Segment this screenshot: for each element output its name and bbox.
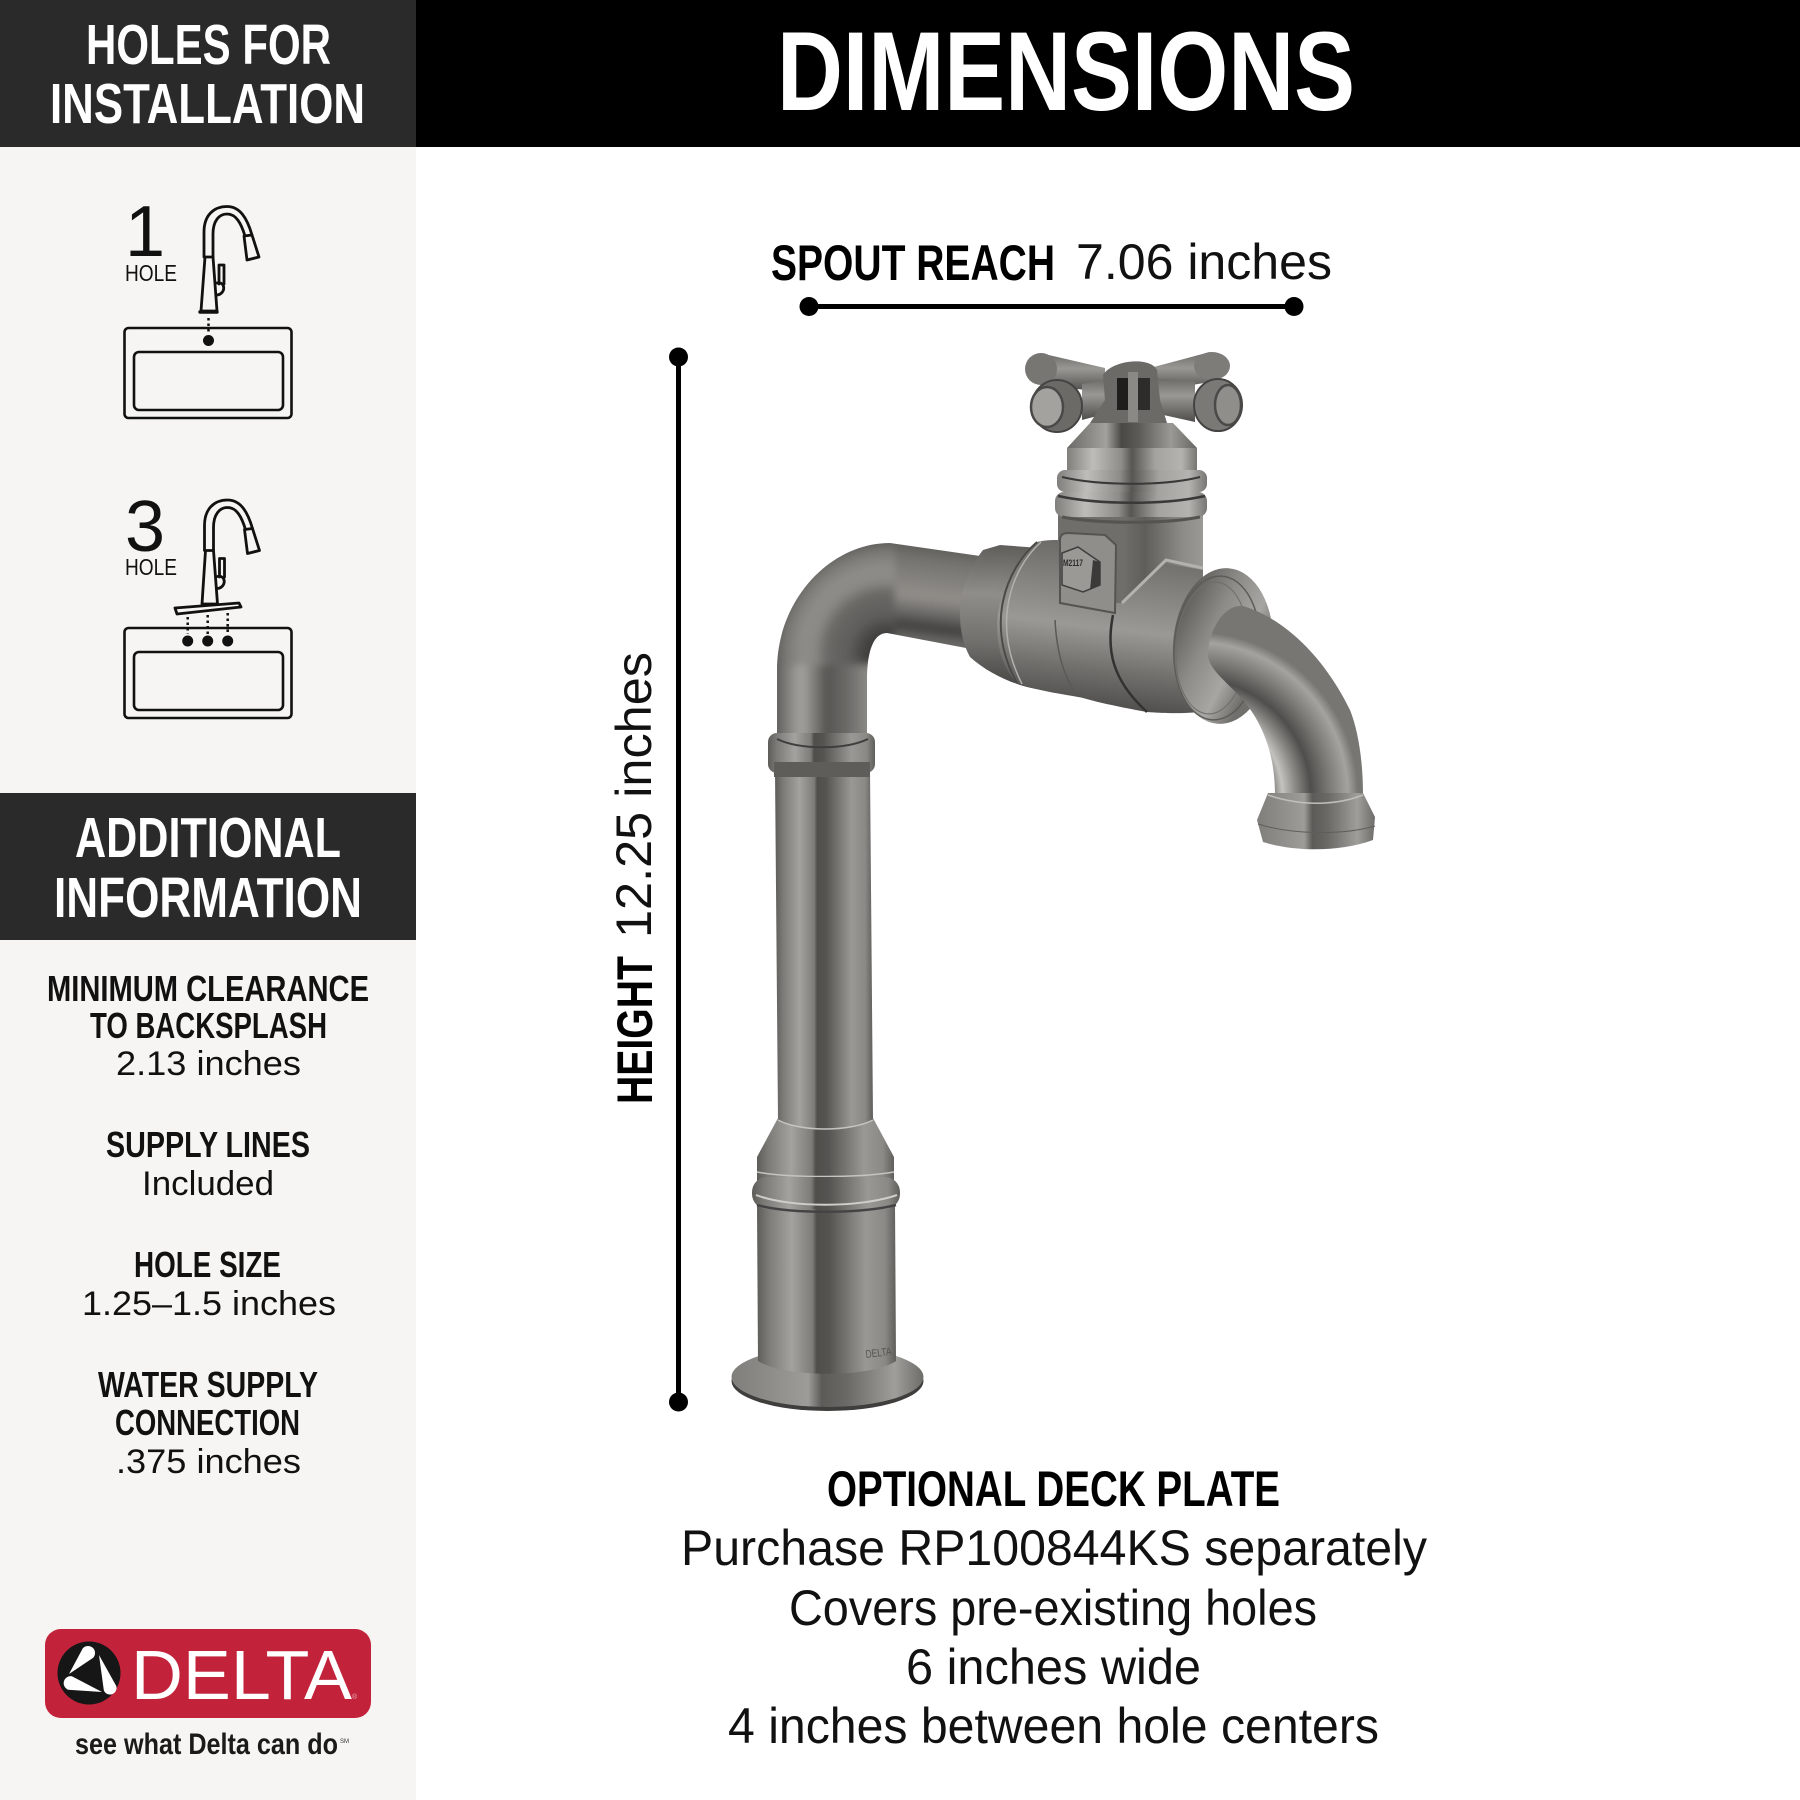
faucet: lower base bbox=[757, 1205, 896, 1374]
header: holes for installation bbox=[0, 0, 416, 147]
faucet: right flange bbox=[1168, 565, 1278, 727]
faucet: valve rings bbox=[1055, 470, 1207, 522]
faucet: spout bbox=[1208, 606, 1363, 795]
faucet: handle back arms bbox=[1025, 352, 1230, 392]
logo: delta: see what Delta can do bbox=[75, 1728, 338, 1761]
icon: sink with three holes bbox=[124, 613, 292, 718]
text block: hole size: HOLE SIZE bbox=[134, 1244, 281, 1285]
title bar: dimensions: DIMENSIONS bbox=[777, 9, 1355, 134]
faucet: elbow pipe bbox=[777, 543, 979, 734]
text block: minimum clearance: TO BACKSPLASH bbox=[90, 1005, 327, 1046]
faucet: handle front arms and hub bbox=[1031, 361, 1242, 432]
faucet: bolt plate bbox=[1060, 533, 1116, 613]
header: additional information: ADDITIONAL bbox=[75, 806, 341, 870]
numeral and label: 3 hole bbox=[125, 487, 177, 580]
dimension: spout reach: 7.06 inches bbox=[1076, 234, 1332, 290]
dimension: spout reach: SPOUT REACH bbox=[771, 235, 1055, 291]
icon: sink with one hole bbox=[124, 318, 292, 418]
text block: minimum clearance: 2.13 inches bbox=[116, 1045, 301, 1083]
text block: optional deck plate: 4 inches between hole centers bbox=[728, 1698, 1379, 1754]
faucet: column ring bbox=[768, 733, 875, 777]
logo: delta bbox=[45, 1629, 371, 1761]
panel: three hole option bbox=[124, 487, 292, 718]
dimension: height: 12.25 inches bbox=[606, 652, 662, 938]
text block: supply lines: SUPPLY LINES bbox=[106, 1124, 310, 1165]
header: additional information: INFORMATION bbox=[54, 866, 362, 930]
text block: optional deck plate bbox=[681, 1461, 1427, 1754]
faucet: spout nozzle bbox=[1257, 793, 1375, 849]
title bar: dimensions bbox=[416, 0, 1800, 147]
faucet: valve dome bbox=[1067, 423, 1197, 480]
text block: minimum clearance bbox=[47, 968, 369, 1083]
faucet: base cone and collar bbox=[752, 1118, 900, 1212]
header: holes for installation: HOLES FOR bbox=[86, 13, 331, 77]
logo: delta: DELTA bbox=[131, 1636, 352, 1714]
numeral and label: 1 hole: 1 bbox=[125, 192, 165, 272]
text block: hole size bbox=[82, 1244, 336, 1323]
text block: supply lines bbox=[106, 1124, 310, 1203]
text block: optional deck plate: OPTIONAL DECK PLATE bbox=[827, 1461, 1280, 1517]
faucet: base flange bbox=[732, 1347, 924, 1411]
numeral and label: 1 hole bbox=[125, 192, 177, 286]
header: additional information bbox=[0, 793, 416, 940]
numeral and label: 3 hole: 3 bbox=[125, 487, 165, 567]
icon: faucet with deck plate bbox=[175, 500, 260, 614]
faucet: lower column bbox=[775, 770, 873, 1129]
text block: hole size: 1.25–1.5 inches bbox=[82, 1285, 336, 1323]
logo: delta: SM bbox=[340, 1739, 349, 1745]
logo: delta: ® bbox=[352, 1693, 358, 1701]
text block: water supply connection bbox=[98, 1364, 318, 1481]
faucet: left collar bbox=[960, 545, 1045, 690]
dimension: spout reach bbox=[771, 234, 1332, 316]
text block: water supply connection: .375 inches bbox=[116, 1443, 301, 1481]
text block: optional deck plate: Covers pre-existing holes bbox=[789, 1580, 1317, 1636]
header: holes for installation: INSTALLATION bbox=[50, 72, 365, 136]
faucet: brand mark: DELTA bbox=[865, 1346, 893, 1361]
panel: left sidebar background bbox=[0, 0, 416, 1800]
dimension: height bbox=[606, 348, 688, 1412]
text block: supply lines: Included bbox=[142, 1165, 274, 1203]
faucet: valve neck bbox=[1058, 505, 1203, 640]
text block: water supply connection: CONNECTION bbox=[115, 1402, 300, 1443]
icon: delta emblem bbox=[58, 1642, 120, 1704]
panel: one hole option bbox=[124, 192, 292, 418]
dimension: height: HEIGHT bbox=[607, 956, 663, 1104]
text block: optional deck plate: Purchase RP100844KS separately bbox=[681, 1520, 1427, 1576]
text block: water supply connection: WATER SUPPLY bbox=[98, 1364, 318, 1405]
text block: optional deck plate: 6 inches wide bbox=[906, 1639, 1201, 1695]
faucet: bolt plate: M2117 bbox=[1063, 558, 1083, 568]
numeral and label: 1 hole: HOLE bbox=[125, 260, 177, 286]
faucet: valve body bbox=[997, 540, 1203, 713]
numeral and label: 3 hole: HOLE bbox=[125, 554, 177, 580]
icon: faucet single hole bbox=[200, 206, 259, 312]
faucet product illustration bbox=[732, 352, 1375, 1411]
text block: minimum clearance: MINIMUM CLEARANCE bbox=[47, 968, 369, 1009]
